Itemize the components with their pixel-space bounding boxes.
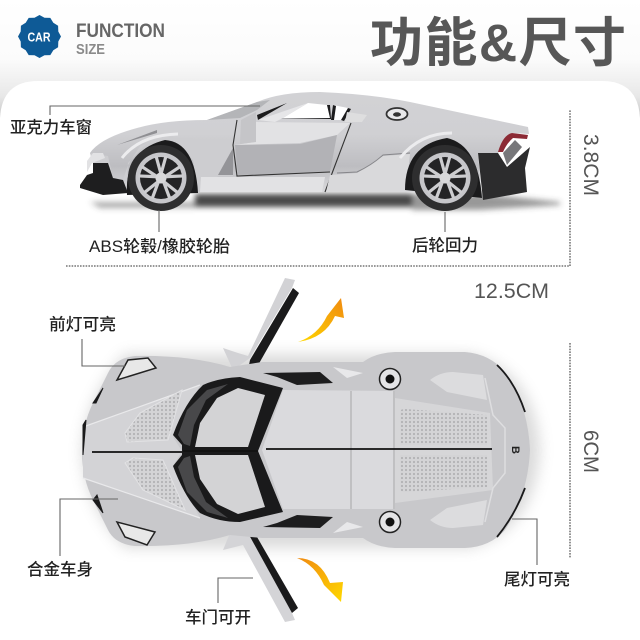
heading: FUNCTION SIZE: FUNCTION bbox=[76, 20, 165, 42]
front nose panel bbox=[90, 137, 233, 192]
dimension: length line bbox=[66, 110, 570, 266]
callout: tail lights bbox=[504, 519, 570, 589]
roof seams bbox=[351, 391, 394, 509]
door upper bbox=[223, 278, 299, 370]
door lower panel bbox=[235, 135, 337, 175]
nose vents bbox=[83, 388, 103, 513]
headlight upper bbox=[117, 358, 156, 380]
side view car bbox=[80, 92, 560, 211]
top view car bbox=[82, 278, 540, 622]
roof panel bbox=[262, 390, 395, 509]
dimension: 3.8CM: 3.8CM bbox=[579, 134, 602, 196]
title: 功能&尺寸 bbox=[370, 14, 626, 73]
windshield bbox=[207, 100, 270, 120]
front bumper bbox=[80, 163, 128, 195]
highlights bbox=[333, 367, 363, 533]
tail strips bbox=[497, 365, 525, 537]
hood center light bbox=[83, 385, 200, 518]
callout: alloy body bbox=[27, 499, 118, 579]
callout: rear pullback: 后轮回力 bbox=[412, 236, 478, 255]
door upper panel bbox=[235, 122, 350, 145]
heading: FUNCTION SIZE: SIZE bbox=[76, 41, 105, 58]
callout: headlights bbox=[49, 315, 125, 366]
front wheel bbox=[128, 145, 194, 211]
callout: rear pullback bbox=[412, 212, 478, 255]
fuel cap lower bbox=[380, 512, 400, 532]
rear wheel bbox=[412, 145, 478, 211]
callout: alloy body: 合金车身 bbox=[27, 559, 93, 579]
dimension: 6CM: 6CM bbox=[579, 430, 602, 473]
rear quarter window bbox=[345, 112, 367, 122]
windshield frame bbox=[173, 377, 283, 522]
callout: acrylic window: 亚克力车窗 bbox=[10, 118, 92, 137]
top shadow bbox=[82, 354, 540, 548]
rear mesh bbox=[503, 140, 522, 165]
callout: acrylic window bbox=[10, 106, 260, 137]
rear sill bbox=[326, 154, 410, 192]
headlight bbox=[117, 130, 157, 145]
callout: headlights: 前灯可亮 bbox=[49, 315, 116, 334]
rear mesh upper bbox=[400, 409, 487, 445]
window frame bbox=[257, 103, 351, 121]
rear vee bbox=[485, 378, 505, 522]
heading: FUNCTION SIZE bbox=[76, 20, 165, 58]
dimension: width line bbox=[569, 343, 571, 558]
window openings bbox=[283, 103, 348, 120]
windshield tint bbox=[178, 384, 228, 518]
arrow upper bbox=[298, 298, 344, 342]
car body top bbox=[82, 352, 530, 548]
arrow lower bbox=[297, 558, 343, 602]
side mirrors lower bbox=[263, 515, 333, 528]
mirror bbox=[240, 112, 256, 144]
body crease bbox=[337, 153, 410, 173]
dimension: 12.5CM: 12.5CM bbox=[474, 280, 549, 303]
tail light bbox=[498, 133, 528, 152]
a-pillar bbox=[258, 103, 308, 122]
wheel arches bbox=[127, 138, 482, 198]
rear diffuser bbox=[478, 147, 530, 200]
ground shadow bbox=[90, 194, 560, 210]
center lines bbox=[92, 449, 492, 452]
windshield glass bbox=[195, 388, 265, 514]
callout: wheels: ABS轮毂/橡胶轮胎 bbox=[89, 237, 231, 256]
header band background bbox=[0, 0, 640, 120]
fuel cap bbox=[386, 108, 408, 120]
callout: doors bbox=[185, 578, 253, 627]
hood mesh lower bbox=[125, 458, 185, 510]
front vent bbox=[218, 148, 233, 175]
rear mesh lower bbox=[400, 455, 487, 492]
badge: CAR: CAR bbox=[28, 30, 50, 44]
rear deck bbox=[395, 398, 493, 503]
hood creases bbox=[83, 385, 200, 518]
door edges bbox=[233, 120, 351, 192]
car body side bbox=[90, 92, 529, 198]
hood mesh upper bbox=[125, 390, 182, 442]
fender highlights bbox=[122, 133, 452, 158]
callout: doors: 车门可开 bbox=[185, 608, 251, 627]
logo B: B bbox=[509, 446, 521, 454]
sill bbox=[200, 177, 325, 192]
fuel cap upper bbox=[380, 368, 400, 390]
door lower bbox=[223, 530, 298, 622]
side mirrors upper bbox=[263, 372, 333, 385]
headlight lower bbox=[117, 522, 155, 545]
rear fender highlights bbox=[430, 372, 487, 528]
badge: CAR bbox=[18, 15, 61, 58]
callout: tail lights: 尾灯可亮 bbox=[504, 570, 570, 589]
nose intake bbox=[87, 153, 105, 172]
